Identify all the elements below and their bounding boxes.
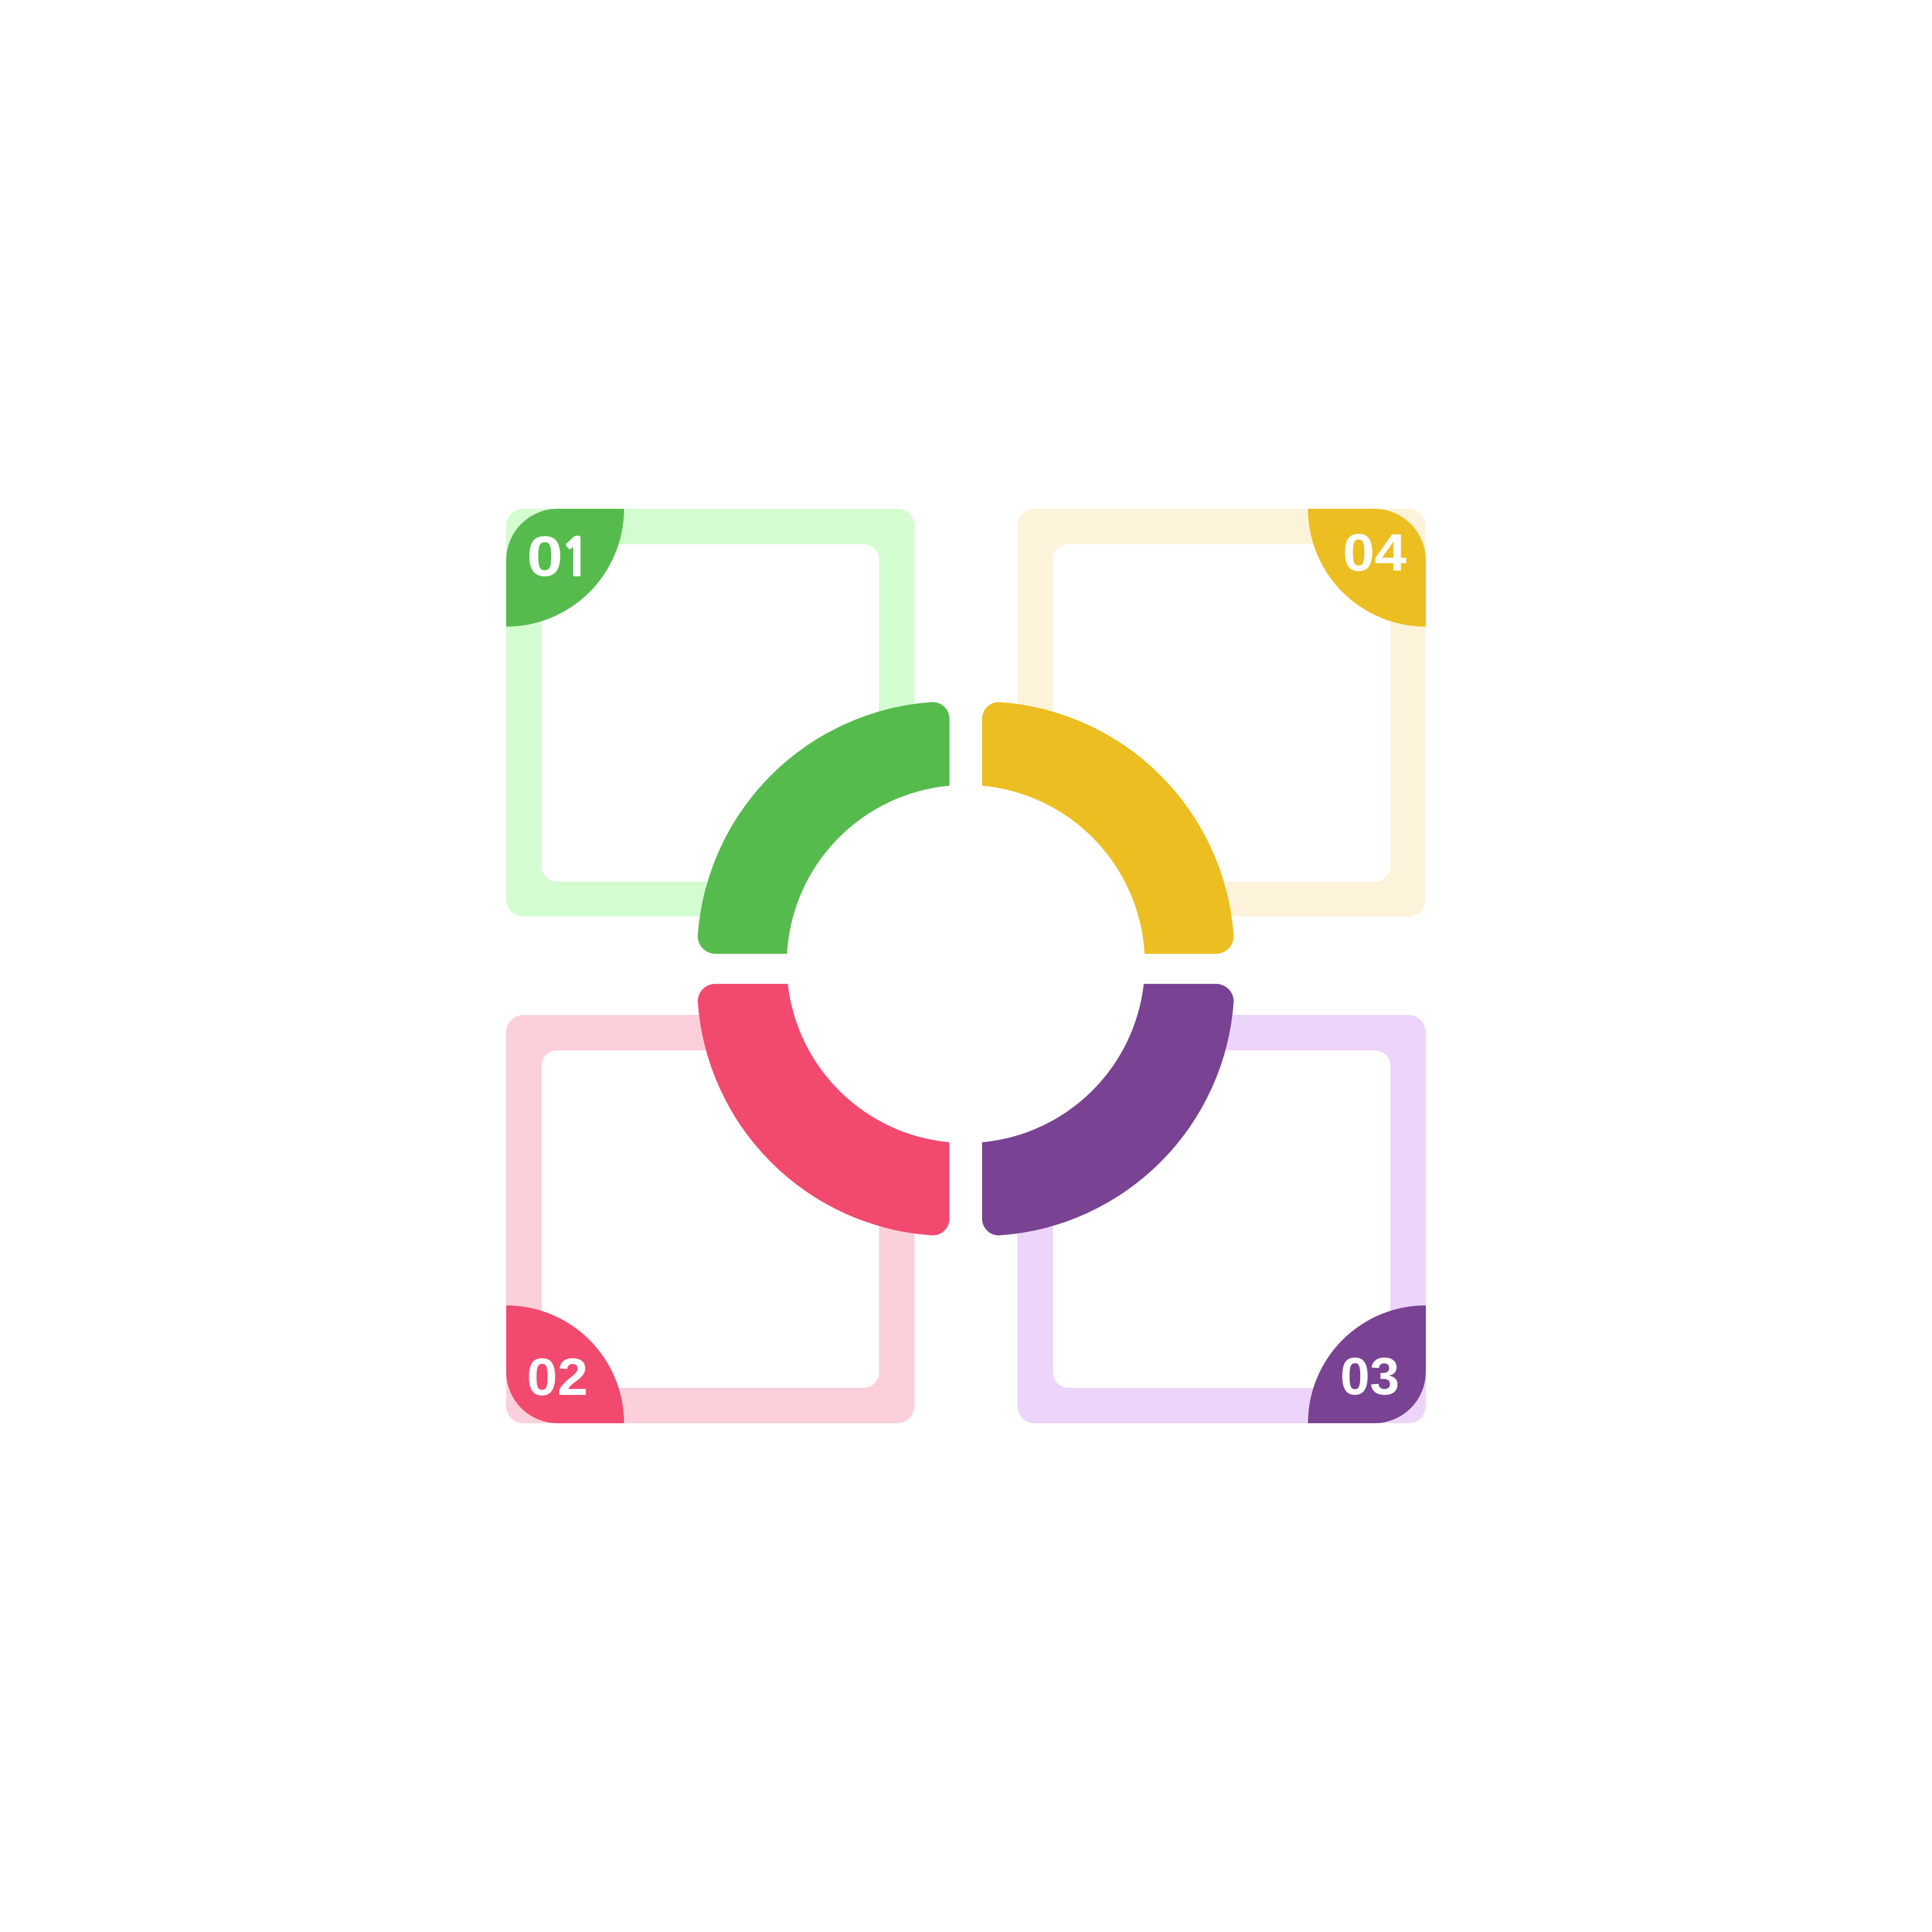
center ring segment: yellow (982, 702, 1234, 954)
panel 01: green frame (506, 509, 914, 916)
number 04: 04 (1343, 524, 1406, 582)
center ring segment: purple (982, 984, 1234, 1235)
number 01: 1 (560, 533, 591, 583)
number 01: 0 (527, 524, 563, 588)
panel 04: yellow frame (1018, 509, 1426, 916)
number 02: 02 (527, 1348, 588, 1406)
frame: purple border (1018, 1015, 1426, 1423)
center white disc masking the frames (743, 744, 1188, 1188)
badge: pink corner leaf (506, 1305, 624, 1423)
frame: pink border (506, 1015, 914, 1423)
frame: green border (506, 509, 914, 916)
center ring segment: pink (697, 984, 949, 1235)
frame: yellow border (1018, 509, 1426, 916)
panel 03: purple frame (1018, 1015, 1426, 1423)
number 03: 03 (1340, 1347, 1399, 1406)
panel 02: pink frame (506, 1015, 914, 1423)
center ring segment: green (697, 702, 949, 954)
badge: purple corner leaf (1308, 1305, 1426, 1423)
badge: green corner leaf (506, 509, 624, 627)
badge: yellow corner leaf (1308, 509, 1426, 627)
number 01 (527, 524, 591, 588)
